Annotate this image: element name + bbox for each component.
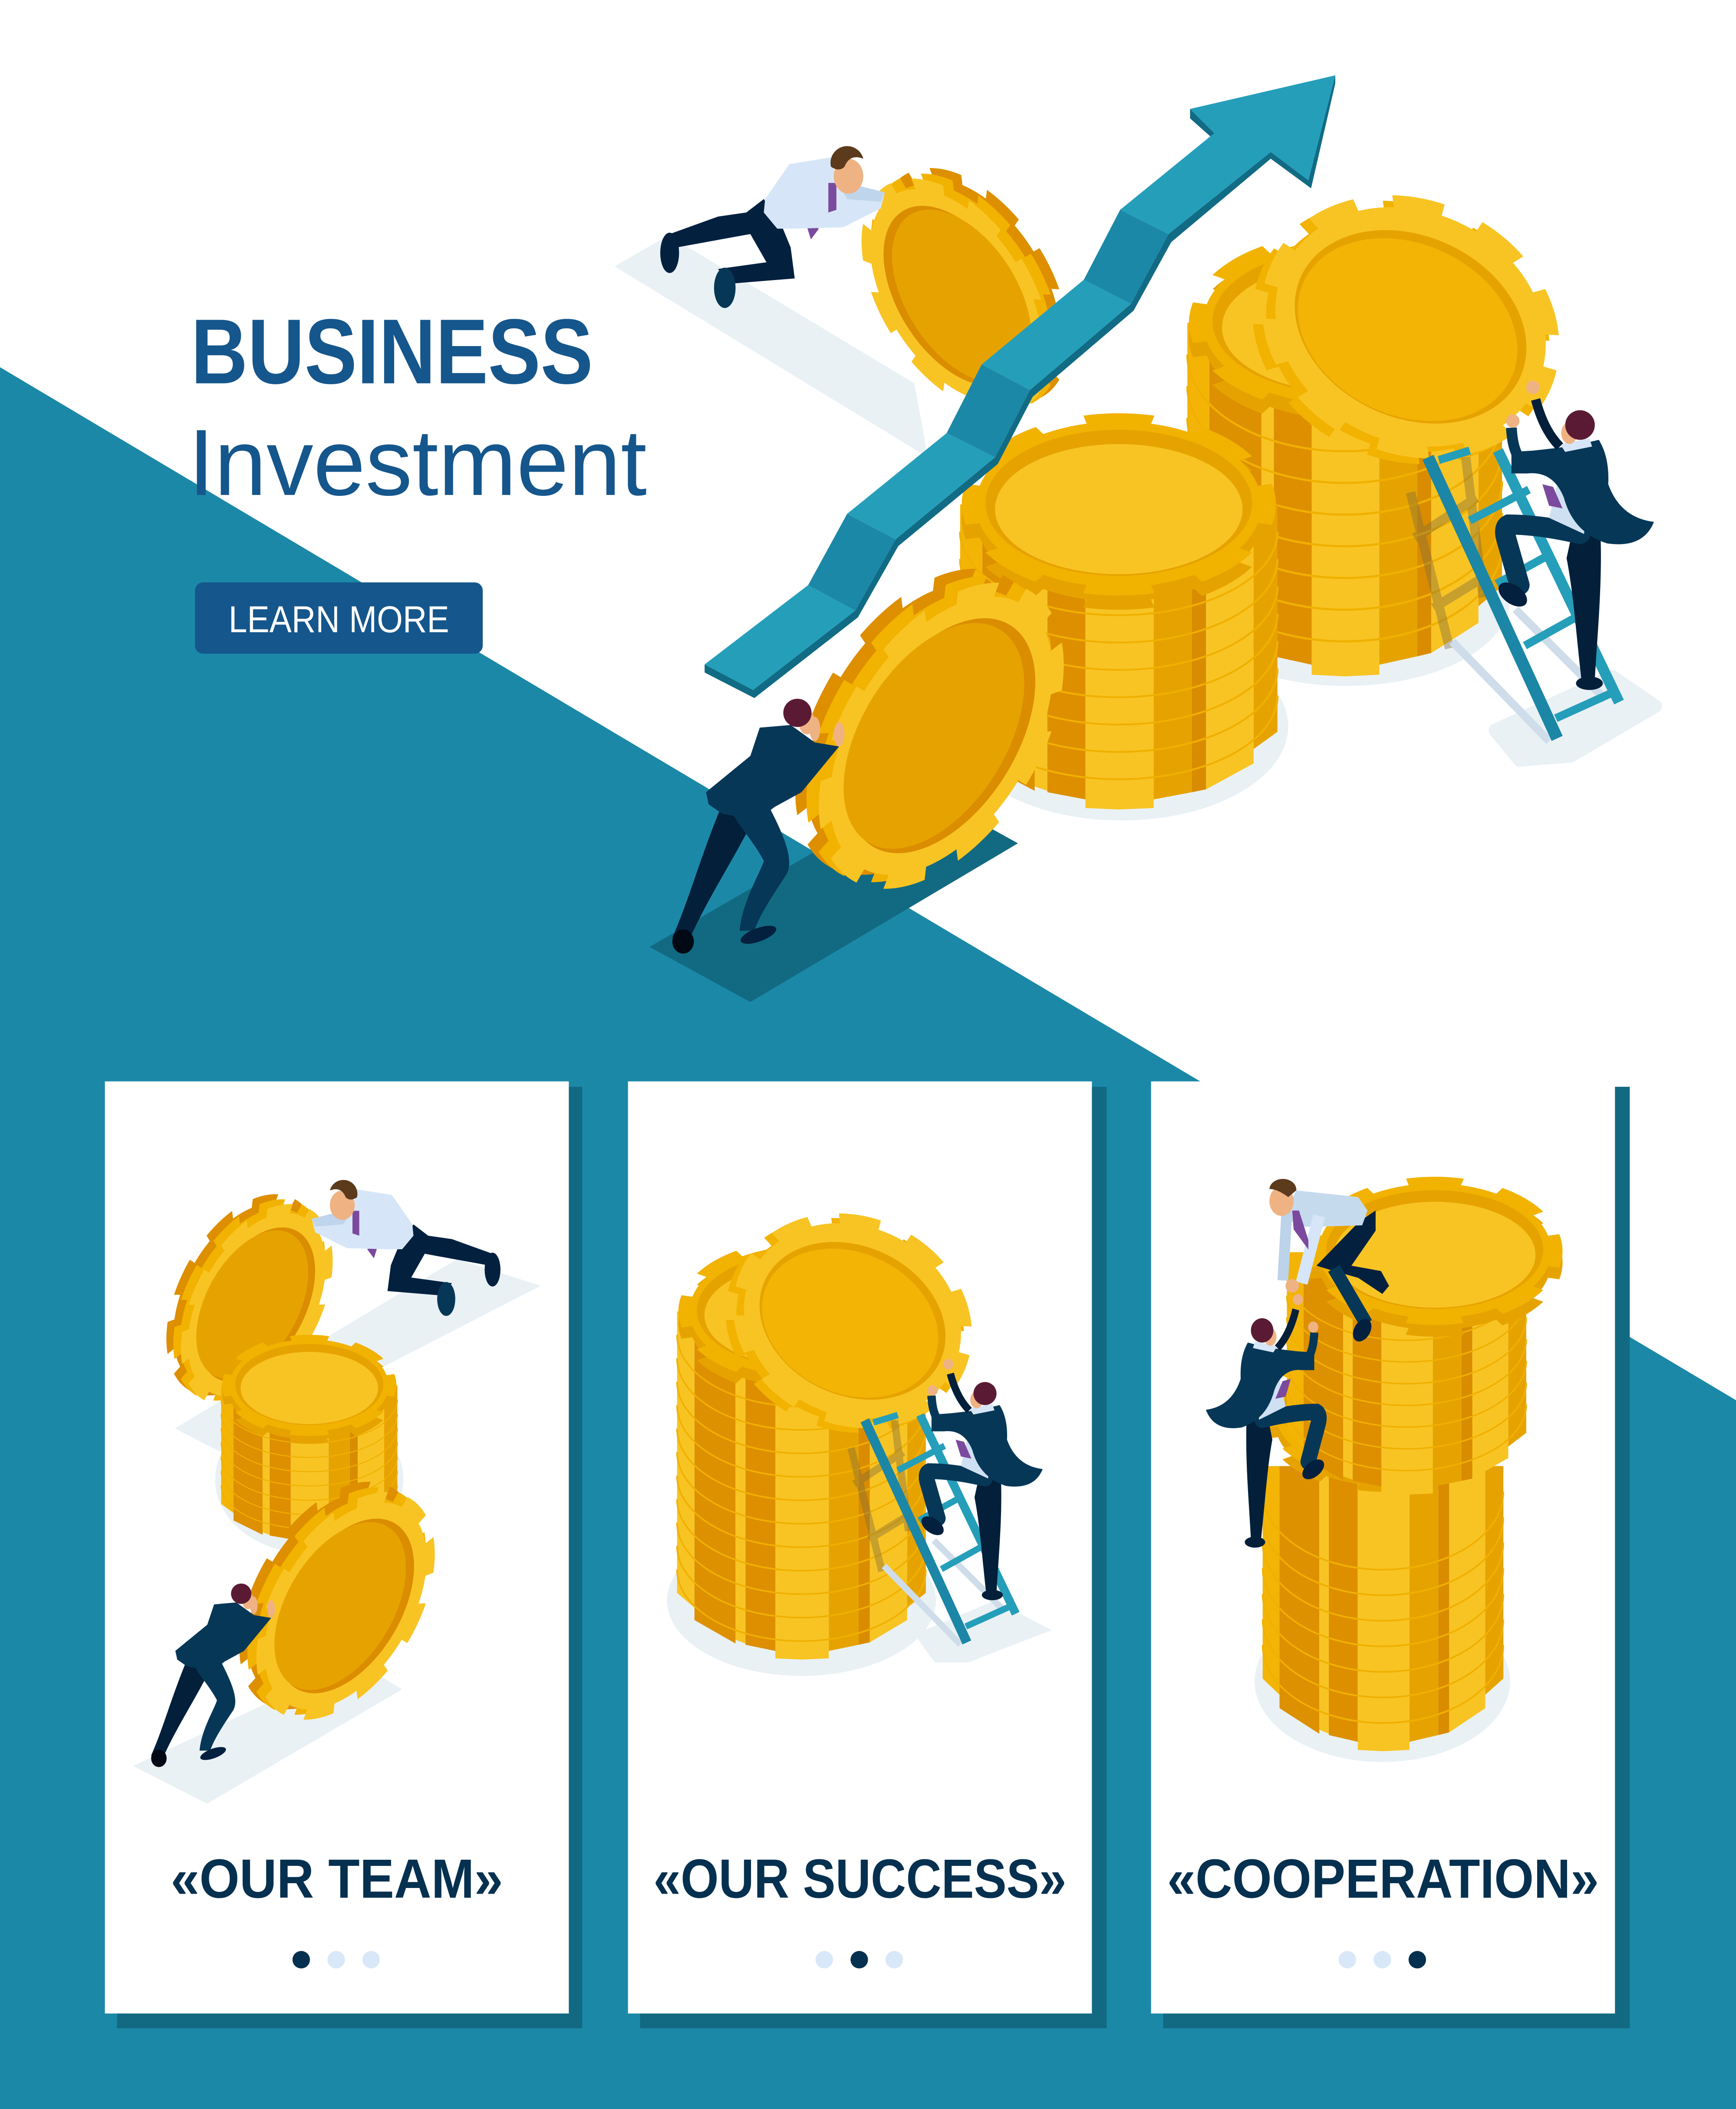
tall back coin stack bbox=[1187, 161, 1585, 677]
ground shadow: pusher track bbox=[649, 823, 1018, 1002]
large coin gear being pushed bbox=[807, 521, 1053, 937]
ground tracks and stack shadow bbox=[133, 1259, 540, 1804]
ground shadow: ladder bbox=[1496, 677, 1655, 760]
white upper area with diagonal edge bbox=[0, 0, 1736, 1400]
ground shadow: middle stack bbox=[955, 632, 1288, 821]
middle coin stack bbox=[960, 422, 1278, 809]
upper coin gear bbox=[173, 1164, 326, 1436]
ladder leaning on stack bbox=[1410, 451, 1619, 741]
man in suit pushing bbox=[151, 1584, 275, 1767]
pagination dots bbox=[816, 1951, 903, 1968]
coin stack bbox=[221, 1340, 397, 1545]
pagination dots bbox=[1339, 1951, 1426, 1968]
lower coin gear bbox=[247, 1446, 427, 1755]
stack shadow bbox=[1255, 1601, 1510, 1762]
man in suit pushing coin bbox=[672, 699, 844, 954]
man in white shirt crawling bbox=[660, 146, 885, 308]
card body bbox=[1151, 1081, 1615, 2013]
ladder bbox=[851, 1415, 1016, 1644]
card body bbox=[105, 1081, 569, 2013]
subtitle: Investment: Investment bbox=[188, 410, 647, 515]
card shadow bbox=[117, 1087, 582, 2028]
button: learn more bbox=[195, 582, 483, 653]
man climbing ladder bbox=[918, 1359, 1043, 1600]
rising growth arrow bbox=[705, 75, 1335, 698]
card title: «OUR TEAM» bbox=[171, 1848, 503, 1910]
upper coin stack bbox=[1287, 1184, 1551, 1495]
card title: «COOPERATION» bbox=[1167, 1848, 1599, 1910]
man climbing ladder bbox=[1494, 381, 1654, 690]
coin stack with tilted gear bbox=[677, 1186, 993, 1660]
panel: our team bbox=[105, 1081, 582, 2028]
ground shadow: back stack bbox=[1182, 511, 1510, 686]
card shadow bbox=[1163, 1087, 1630, 2028]
man in white shirt bbox=[312, 1180, 501, 1316]
card shadow bbox=[640, 1087, 1107, 2028]
button: learn more: LEARN MORE bbox=[229, 598, 449, 640]
panel: our success bbox=[628, 1081, 1107, 2028]
man in white shirt reaching down bbox=[1269, 1179, 1389, 1345]
upright coin gear pushed by crawling man bbox=[870, 131, 1060, 450]
ground shadow: crawler track bbox=[615, 235, 928, 457]
title: BUSINESS: BUSINESS bbox=[191, 300, 593, 403]
lower coin stack bbox=[1263, 1350, 1503, 1751]
panel: cooperation bbox=[1151, 1081, 1630, 2028]
man in suit climbing bbox=[1206, 1294, 1328, 1548]
pagination dots bbox=[293, 1951, 380, 1968]
card body bbox=[628, 1081, 1092, 2013]
hero illustration bbox=[615, 75, 1655, 1002]
card title: «OUR SUCCESS» bbox=[653, 1848, 1066, 1910]
ground shadows bbox=[667, 1525, 1051, 1676]
